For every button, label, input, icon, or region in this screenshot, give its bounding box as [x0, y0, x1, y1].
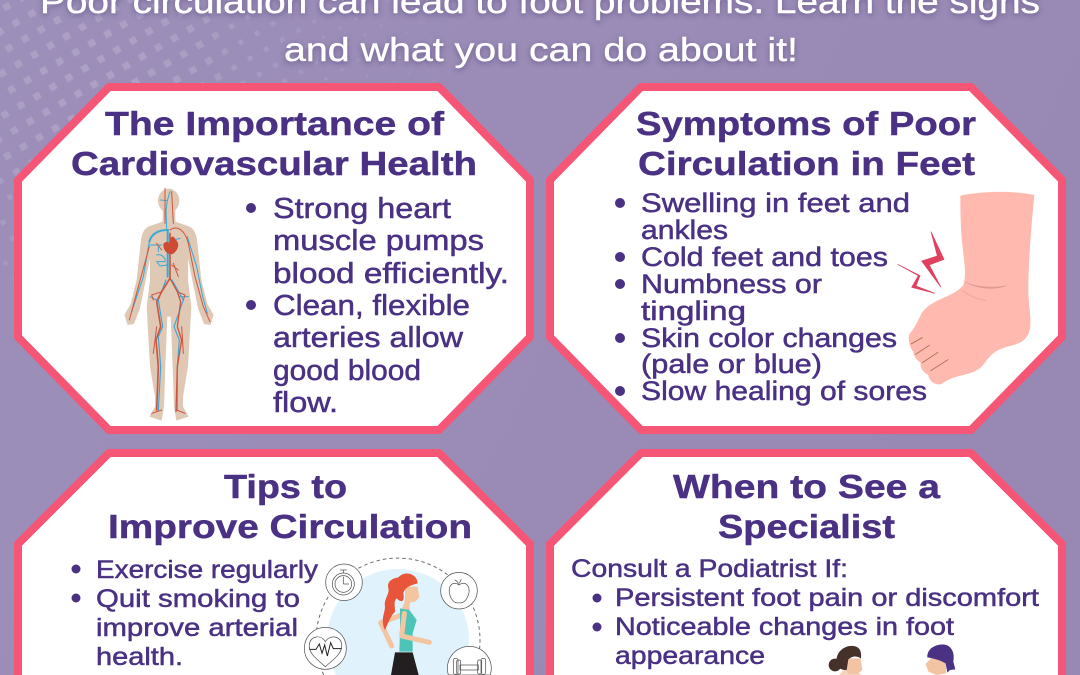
- panel 2 bullet list: ankles: [641, 215, 728, 245]
- panel 1 bullet list: blood efficiently.: [273, 258, 509, 290]
- panel 2 heading: Symptoms of Poor: [636, 105, 976, 142]
- panel 4 bullet list: Noticeable changes in foot: [615, 613, 954, 641]
- panel: cardiovascular health: [18, 87, 530, 430]
- panel 2 bullet list: Numbness or: [641, 269, 822, 299]
- icon: dumbbell: [447, 646, 491, 675]
- panel 2 bullet list: tingling: [641, 296, 746, 326]
- panel 2 heading: [636, 105, 976, 182]
- panel 4 bullet dots: [592, 594, 602, 632]
- panel 3 bullet dots: [72, 564, 80, 602]
- icon: swollen foot: [898, 192, 1034, 384]
- panel 2 bullet dots: [615, 198, 625, 396]
- panel 2 octagon: [550, 87, 1062, 430]
- panel 3 octagon: [18, 453, 530, 675]
- panel 2 bullet list: (pale or blue): [641, 349, 822, 379]
- icon: patient and doctor: [829, 644, 955, 675]
- panel 1 heading: Cardiovascular Health: [71, 145, 477, 182]
- panel 1 bullet list: good blood: [273, 355, 421, 387]
- panel 2 bullet list: Cold feet and toes: [641, 242, 888, 272]
- panel 4 heading: Specialist: [718, 508, 895, 545]
- icon: heart rate: [304, 627, 346, 669]
- panel 1 heading: [71, 105, 477, 182]
- panel 1 bullet list: [273, 193, 509, 419]
- panel 2 bullet list: Swelling in feet and: [641, 188, 910, 218]
- panel 3 heading: Tips to: [224, 468, 347, 505]
- icon: runner with fitness icons: [304, 558, 491, 675]
- icon: apple: [441, 572, 477, 609]
- panel 1 bullet list: Clean, flexible: [273, 290, 470, 322]
- specialist head: [926, 644, 955, 675]
- panel 1 heading: The Importance of: [105, 105, 445, 142]
- panel 3 heading: [108, 468, 472, 545]
- panel 3 bullet list: [96, 556, 319, 671]
- runner figure: [381, 574, 429, 675]
- icon: stopwatch: [326, 564, 362, 601]
- header text: and what you can do about it!: [284, 31, 798, 68]
- panel 4 intro text: Consult a Podiatrist If:: [571, 555, 848, 583]
- panel 1 bullet list: flow.: [273, 387, 338, 419]
- icon: human circulatory system: [124, 188, 214, 421]
- panel 4 heading: When to See a: [673, 468, 941, 505]
- panel 4 bullet list: appearance: [615, 642, 765, 670]
- panel 4 octagon: [550, 453, 1062, 675]
- panel 1 bullet list: arteries allow: [273, 322, 463, 354]
- patient head: [829, 646, 862, 675]
- panel 3 heading: Improve Circulation: [108, 508, 472, 545]
- panel 3 bullet list: Exercise regularly: [96, 556, 319, 584]
- panel 1 bullet dots: [246, 203, 256, 310]
- panel 2 heading: Circulation in Feet: [638, 145, 975, 182]
- panel 1 bullet list: Strong heart: [273, 193, 451, 225]
- panel 2 bullet list: Slow healing of sores: [641, 376, 927, 406]
- panel 3 bullet list: improve arterial: [96, 614, 298, 642]
- panel 3 bullet list: health.: [96, 643, 183, 671]
- panel: tips: [18, 453, 530, 675]
- panel 4 heading: [673, 468, 941, 545]
- panel 4 bullet list: Persistent foot pain or discomfort: [615, 584, 1039, 612]
- panel: symptoms: [550, 87, 1062, 430]
- panel 4 bullet list: [615, 584, 1039, 670]
- panel: when to see a specialist: [550, 453, 1062, 675]
- header text: [40, 0, 1040, 68]
- panel 3 bullet list: Quit smoking to: [96, 585, 300, 613]
- panel 1 octagon: [18, 87, 530, 430]
- panel 2 bullet list: [641, 188, 927, 406]
- panel 1 bullet list: muscle pumps: [273, 225, 484, 257]
- background: [0, 0, 364, 290]
- panel 2 bullet list: Skin color changes: [641, 323, 897, 353]
